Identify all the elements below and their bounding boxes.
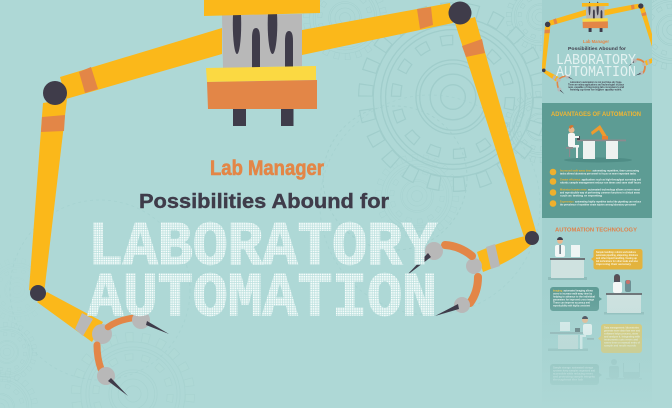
preview title: LABORATORY: [556, 53, 636, 69]
light yellow callout: [598, 324, 642, 353]
teal callout: These can improve accuracy and: [553, 300, 590, 304]
yellow callout: [591, 249, 642, 270]
right wrist joint: [525, 231, 539, 245]
bench 2 with scientist: [604, 274, 644, 314]
left upper arm: [60, 28, 222, 99]
right gripper: [406, 242, 482, 316]
scientist and instrument 4: [606, 359, 642, 380]
right vertical arm: [455, 17, 537, 240]
title line 1: LABORATORY: [88, 212, 438, 283]
light yellow callout: sample and result records: [604, 344, 636, 348]
light yellow callout: instruments cuts errors and: [604, 338, 638, 342]
teal callout 2: throughout the lab: [553, 378, 583, 382]
teal callout 2: Sample storage: automated storage: [553, 366, 593, 370]
heading: Possibilities Abound for: Possibilities Abound for: [139, 190, 389, 213]
teal callout: users to increase walk-away time by: [553, 292, 592, 296]
sidebar background: [542, 0, 652, 408]
advantage 3: [550, 188, 640, 198]
advantage 2: [550, 178, 641, 185]
preview intro text: now, capable of improving lab consistency and: [568, 85, 624, 89]
left elbow joint: [43, 81, 67, 105]
teal callout: helping to advance to the individual: [553, 294, 595, 298]
preview heading: Possibilities Abound for: [568, 46, 626, 52]
yellow callout: Sample handling: robotic workstations: [596, 250, 636, 254]
advantage 3: such as testing or reporting: [560, 194, 602, 198]
robot head: [204, 0, 320, 126]
panel: advantages of automation: [542, 103, 652, 218]
advantage 3: Minimize human error: automated technology allows a more exact: [560, 188, 640, 192]
preview intro text: [568, 80, 624, 92]
teal callout 2: systems keep samples organized and: [553, 368, 595, 372]
teal callout 2: accessible while reducing errors: [553, 372, 593, 376]
technology heading: AUTOMATION TECHNOLOGY: [555, 228, 637, 234]
left vertical arm: [29, 99, 67, 294]
preview logo: Lab Manager: [583, 39, 609, 44]
right elbow joint: [448, 2, 472, 24]
lab bench illustration: [564, 125, 632, 162]
teal callout: parameters for improved cross-image: [553, 298, 594, 302]
advantages heading: ADVANTAGES OF AUTOMATION: [551, 112, 641, 118]
right upper arm: [302, 3, 453, 55]
advantages list: [550, 168, 641, 207]
light yellow callout: and analyze it. Integrating with: [604, 334, 640, 338]
preview title: [556, 53, 636, 81]
yellow callout: automate pipetting, aliquoting, dilutions: [596, 253, 638, 257]
bench 1 with scientist: [548, 237, 587, 280]
yellow callout: lab technicians for other tasks and also: [596, 259, 638, 263]
teal callout: Imaging: automated imaging allows: [553, 288, 593, 292]
robot arms: [29, 0, 539, 396]
advantage 4: Ergonomics: automating highly repetitive tasks like pipetting can reduce: [560, 200, 641, 204]
light yellow callout: generate more data than ever and: [604, 328, 640, 332]
advantage 3: and reproducible way of performing common functions in clinical areas: [560, 190, 640, 194]
sidebar bottom fade: [542, 290, 652, 408]
preview intro text: Laboratory automation is not just blue-sky hype.: [570, 80, 622, 84]
yellow callout: improving their accuracy: [596, 262, 632, 266]
left lower arm: [37, 292, 103, 342]
title line 2: AUTOMATION: [88, 263, 437, 334]
yellow callout: and other liquid handling, freeing up: [596, 256, 637, 260]
advantage 1: [550, 168, 639, 176]
left gripper: [92, 311, 169, 396]
light yellow callout: Data management: laboratories: [604, 326, 639, 330]
preview title: AUTOMATION: [556, 65, 636, 81]
light yellow callout: software helps process, store: [604, 332, 638, 336]
advantage 2: Greater efficiency: applications such as high-throughput screening and: [560, 178, 641, 182]
title: Laboratory Automation: [88, 212, 438, 334]
logo: Lab Manager: Lab Manager: [210, 157, 324, 180]
light yellow callout: saves time on manual entry of: [604, 340, 640, 344]
right lower arm: [477, 235, 532, 272]
teal callout: [550, 287, 602, 311]
preview panel: intro: [542, 2, 659, 94]
panel: automation technology: [548, 228, 644, 385]
advantage 4: the prevalence of repetitive strain injuries among laboratory personnel: [560, 202, 636, 206]
advantage 2: robotic sample management reduce run times and save staff hours: [560, 180, 641, 184]
advantage 4: [550, 200, 641, 207]
preview intro text: freeing up time for higher quality work.: [570, 88, 622, 92]
preview arms: [542, 2, 659, 94]
teal callout: reproducibility with highly consistent: [553, 304, 590, 308]
advantage 1: tasks allows laboratory personnel to focus on more important tasks: [560, 172, 636, 176]
teal callout 2: and protecting sample integrity: [553, 374, 596, 378]
left wrist joint: [30, 285, 46, 301]
advantage 1: Increased walk-away time: automating repetitive, time-consuming: [560, 168, 639, 172]
teal callout 2: [550, 364, 602, 385]
bench 3 with scientist: [548, 316, 594, 351]
preview intro text: There are many applications and technologies in place: [568, 82, 624, 86]
